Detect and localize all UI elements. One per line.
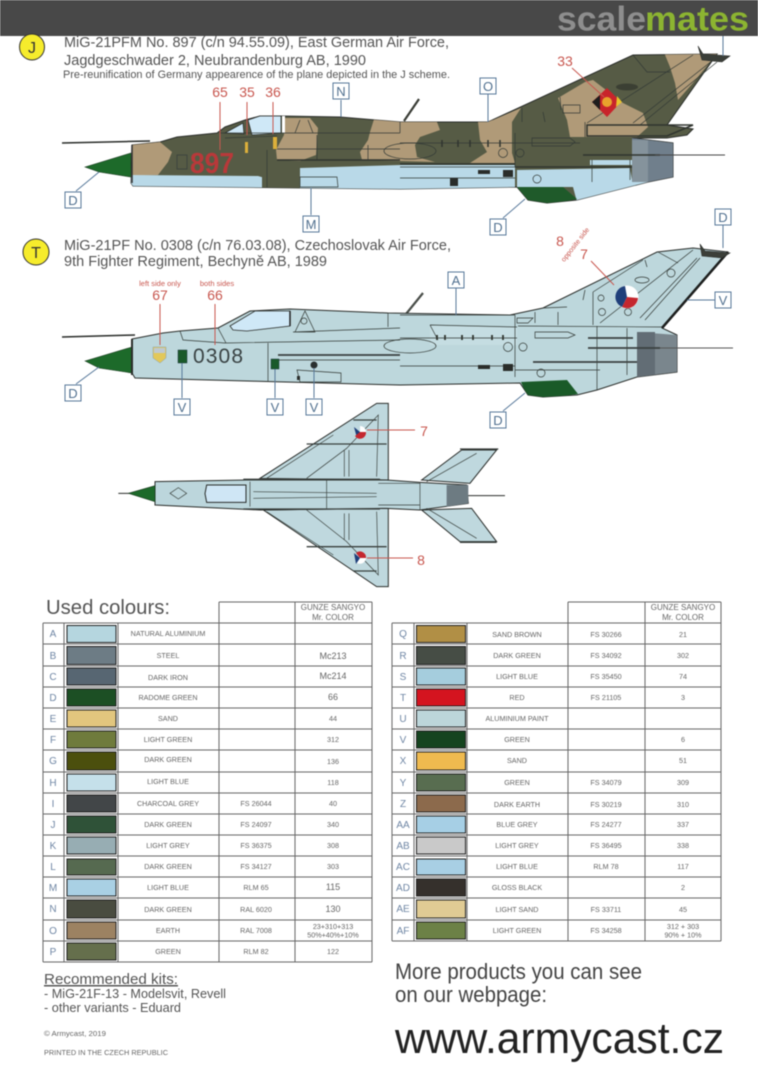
colour table left: DARK GREEN bbox=[144, 905, 192, 914]
colour letter callouts: A bbox=[452, 273, 461, 288]
colour table left: EARTH bbox=[156, 926, 180, 935]
top view roundel lower wing bbox=[354, 551, 366, 564]
recommended kits bbox=[44, 971, 226, 1015]
colour table right: LIGHT BLUE bbox=[496, 862, 538, 871]
colour table right: LIGHT SAND bbox=[495, 905, 539, 914]
colour table right: 51 bbox=[679, 756, 687, 765]
colour table right: R bbox=[399, 651, 407, 662]
aircraft J fin emblem bbox=[592, 88, 622, 117]
colour letter callouts: O bbox=[483, 79, 493, 94]
colour table left: D bbox=[49, 693, 57, 704]
colour table right: GUNZE SANGYO bbox=[651, 603, 715, 612]
scheme T title bbox=[64, 238, 451, 270]
scheme T badge: T bbox=[31, 245, 41, 262]
scheme J badge bbox=[20, 34, 44, 60]
colour table right: AA bbox=[396, 820, 410, 831]
colour table left: RLM 82 bbox=[243, 947, 269, 956]
colour table left: STEEL bbox=[157, 651, 179, 660]
red decal callouts: left side only bbox=[139, 279, 181, 288]
red decal callouts: opposite side bbox=[560, 227, 591, 263]
colour table left: LIGHT BLUE bbox=[147, 883, 189, 892]
colour table left: C bbox=[49, 672, 57, 683]
colour table left: 23+310+313 bbox=[313, 922, 353, 931]
colour table right: Y bbox=[400, 778, 407, 789]
scheme J title: MiG-21PFM No. 897 (c/n 94.55.09), East German Air Force, bbox=[64, 35, 449, 51]
colour table right: BLUE GREY bbox=[496, 820, 538, 829]
colour table right: DARK GREEN bbox=[493, 651, 541, 660]
colour table left: L bbox=[50, 862, 56, 873]
colour table left: 308 bbox=[327, 841, 339, 850]
colour table left: 130 bbox=[325, 904, 341, 914]
colour table left: RAL 6020 bbox=[240, 905, 272, 914]
colour letter callouts: D bbox=[493, 220, 503, 235]
colour table right: FS 30266 bbox=[590, 630, 622, 639]
colour table left: FS 24097 bbox=[240, 820, 272, 829]
colour table right: Z bbox=[400, 799, 406, 810]
aircraft J side view bbox=[62, 46, 730, 205]
colour table right: GREEN bbox=[504, 778, 530, 787]
colour table left: F bbox=[50, 735, 56, 746]
colour table right: FS 34079 bbox=[590, 778, 622, 787]
colour table left: 50%+40%+10% bbox=[307, 930, 359, 940]
colour table left: LIGHT BLUE bbox=[147, 777, 189, 786]
colour table left: RLM 65 bbox=[243, 883, 269, 892]
colour table right: FS 24277 bbox=[590, 820, 622, 829]
scheme T title: MiG-21PF No. 0308 (c/n 76.03.08), Czechoslovak Air Force, bbox=[64, 238, 451, 254]
colour table right: U bbox=[399, 714, 407, 725]
colour table left: FS 26044 bbox=[240, 799, 272, 808]
red decal callouts bbox=[139, 53, 614, 568]
colour table right: 312 + 303 bbox=[667, 922, 699, 931]
colour table left: NATURAL ALUMINIUM bbox=[131, 629, 205, 638]
red decal callouts: 36 bbox=[265, 84, 281, 100]
colour table left: J bbox=[50, 820, 56, 831]
colour table right: X bbox=[400, 756, 407, 767]
colour table left: O bbox=[49, 926, 57, 937]
colour table right: 337 bbox=[677, 820, 689, 829]
colour table left: 40 bbox=[329, 799, 337, 808]
colour table right: AD bbox=[396, 883, 410, 894]
colour table left: RAL 7008 bbox=[240, 926, 272, 935]
colour letter callouts: D bbox=[718, 210, 728, 225]
colour table right: SAND bbox=[507, 756, 527, 765]
colour table left: LIGHT GREEN bbox=[144, 735, 192, 744]
scheme J badge: J bbox=[28, 40, 36, 57]
colour table left: FS 34127 bbox=[240, 862, 272, 871]
red decal callouts: 67 bbox=[152, 287, 168, 303]
header bar: scalemates bbox=[0, 0, 758, 38]
colour table right: FS 30219 bbox=[590, 800, 622, 809]
aircraft J number 897: 897 bbox=[190, 148, 234, 180]
colour table right: GLOSS BLACK bbox=[492, 883, 542, 892]
aircraft T roundel bbox=[615, 286, 638, 308]
colour table right: V bbox=[400, 735, 407, 746]
header bar: scalemates: mates bbox=[645, 0, 749, 38]
colour table right: RED bbox=[509, 693, 525, 702]
colour table left: A bbox=[50, 629, 57, 640]
colour table right: ALUMINIUM PAINT bbox=[486, 714, 549, 723]
colour table left: K bbox=[50, 841, 57, 852]
colour table right: 45 bbox=[679, 905, 687, 914]
recommended kits: Recommended kits: bbox=[44, 971, 178, 988]
colour table right: SAND BROWN bbox=[492, 630, 542, 639]
scheme J title: Pre-reunification of Germany appearence of the plane depicted in the J scheme. bbox=[63, 69, 450, 81]
colour table right: FS 34258 bbox=[590, 926, 622, 935]
colour table left bbox=[43, 602, 372, 962]
colour table left: M bbox=[49, 883, 57, 894]
colour table right: FS 35450 bbox=[590, 672, 622, 681]
colour table left: 312 bbox=[327, 735, 339, 744]
red decal callouts: 8 bbox=[417, 552, 425, 568]
red decal callouts: 33 bbox=[557, 53, 573, 69]
colour table left: 44 bbox=[329, 714, 337, 723]
colour letter callouts: D bbox=[68, 386, 78, 401]
colour table left: B bbox=[50, 651, 57, 662]
top view roundel upper wing bbox=[354, 426, 366, 439]
colour table right: 338 bbox=[677, 841, 689, 850]
aircraft T top view bbox=[118, 403, 505, 587]
colour table right: 74 bbox=[679, 672, 687, 681]
recommended kits: - MiG-21F-13 - Modelsvit, Revell bbox=[44, 986, 226, 1001]
colour letter callouts: D bbox=[68, 193, 78, 208]
colour table left: RADOME GREEN bbox=[138, 693, 198, 702]
colour table left: 340 bbox=[327, 820, 339, 829]
colour table left: SAND bbox=[158, 714, 178, 723]
copyright and print note bbox=[44, 1029, 168, 1057]
colour table left: Mc214 bbox=[319, 671, 347, 681]
red decal callouts: 66 bbox=[207, 287, 223, 303]
colour table right: 2 bbox=[681, 883, 685, 892]
colour table left: G bbox=[49, 756, 57, 767]
colour table left: 122 bbox=[327, 947, 339, 956]
colour table right: T bbox=[400, 693, 406, 704]
colour table left: 118 bbox=[327, 778, 339, 787]
red decal callouts: 65 bbox=[212, 84, 228, 100]
colour table right: LIGHT GREEN bbox=[493, 926, 541, 935]
colour table left: GREEN bbox=[155, 947, 181, 956]
colour letter callouts: M bbox=[306, 217, 316, 232]
colour table left: FS 36375 bbox=[240, 841, 272, 850]
colour table left: 303 bbox=[327, 862, 339, 871]
webpage promo: www.armycast.cz bbox=[394, 1014, 724, 1063]
colour table left: GUNZE SANGYO bbox=[301, 603, 365, 612]
colour table left: 115 bbox=[326, 882, 340, 892]
colour letter callouts: D bbox=[493, 413, 503, 428]
aircraft T nose markings bbox=[153, 347, 318, 369]
colour table left: LIGHT GREY bbox=[146, 841, 190, 850]
colour table left: 66 bbox=[328, 692, 338, 702]
colour table right: GREEN bbox=[504, 735, 530, 744]
red decal callouts: 7 bbox=[580, 246, 588, 262]
colour table left: DARK GREEN bbox=[144, 755, 192, 764]
colour table right: Q bbox=[399, 629, 407, 640]
aircraft T side view bbox=[62, 244, 733, 399]
header bar: scalemates: scale bbox=[557, 0, 646, 38]
colour letter callouts: V bbox=[178, 400, 187, 415]
colour table left: DARK IRON bbox=[148, 673, 188, 682]
red decal callouts: 35 bbox=[239, 84, 255, 100]
red decal callouts: 8 bbox=[556, 233, 564, 249]
colour table right: AB bbox=[396, 841, 410, 852]
colour table right: FS 36495 bbox=[590, 841, 622, 850]
webpage promo: on our webpage: bbox=[395, 982, 547, 1007]
scheme J title: Jagdgeschwader 2, Neubrandenburg AB, 1990 bbox=[64, 53, 366, 69]
colour letter callouts: V bbox=[310, 400, 319, 415]
webpage promo: More products you can see bbox=[395, 959, 642, 984]
colour letter callouts bbox=[65, 36, 731, 428]
colour letter callouts: V bbox=[719, 293, 728, 308]
colour table right: LIGHT GREY bbox=[495, 841, 539, 850]
colour table left: Mr. COLOR bbox=[312, 613, 354, 622]
colour table right: AC bbox=[396, 862, 410, 873]
colour table right: 302 bbox=[677, 651, 689, 660]
copyright and print note: PRINTED IN THE CZECH REPUBLIC bbox=[44, 1050, 168, 1057]
colour table left: CHARCOAL GREY bbox=[137, 799, 199, 808]
scheme T badge bbox=[23, 239, 49, 265]
colour table left: Mc213 bbox=[319, 651, 347, 661]
colour table left: DARK GREEN bbox=[144, 862, 192, 871]
colour table right: 309 bbox=[677, 778, 689, 787]
colour table right: AE bbox=[396, 904, 410, 915]
colour table right: 310 bbox=[677, 800, 689, 809]
colour table right: FS 33711 bbox=[591, 905, 621, 914]
heading: used colours: Used colours: bbox=[46, 596, 170, 619]
colour table right: 21 bbox=[679, 630, 687, 639]
colour table left: N bbox=[49, 904, 57, 915]
red decal callouts: 7 bbox=[420, 423, 428, 439]
colour letter callouts: V bbox=[271, 400, 280, 415]
colour table right bbox=[392, 602, 721, 941]
aircraft T number 0308: 0308 bbox=[193, 345, 243, 368]
colour table right: 3 bbox=[681, 693, 685, 702]
red decal callouts: both sides bbox=[200, 279, 234, 288]
colour table left: 136 bbox=[327, 757, 339, 766]
colour table right: FS 34092 bbox=[590, 651, 622, 660]
colour table right: S bbox=[400, 672, 407, 683]
colour letter callouts: N bbox=[336, 84, 346, 99]
scheme J title bbox=[63, 35, 450, 81]
colour table left: H bbox=[49, 778, 57, 789]
colour table left: P bbox=[50, 947, 57, 958]
colour table right: 90% + 10% bbox=[665, 930, 702, 940]
colour table left: DARK GREEN bbox=[144, 820, 192, 829]
colour table right: LIGHT BLUE bbox=[496, 672, 538, 681]
webpage promo bbox=[394, 959, 724, 1063]
colour table right: 117 bbox=[677, 862, 689, 871]
colour table right: Mr. COLOR bbox=[662, 613, 704, 622]
colour table left: I bbox=[52, 799, 54, 810]
colour table right: 6 bbox=[681, 735, 685, 744]
colour table right: DARK EARTH bbox=[494, 800, 540, 809]
colour table right: AF bbox=[397, 926, 409, 937]
copyright and print note: © Armycast, 2019 bbox=[44, 1029, 106, 1038]
colour table right: RLM 78 bbox=[593, 862, 619, 871]
colour table right: FS 21105 bbox=[591, 693, 621, 702]
scheme T title: 9th Fighter Regiment, Bechyně AB, 1989 bbox=[64, 254, 327, 270]
recommended kits: - other variants - Eduard bbox=[44, 1000, 181, 1015]
colour table left: E bbox=[50, 714, 57, 725]
